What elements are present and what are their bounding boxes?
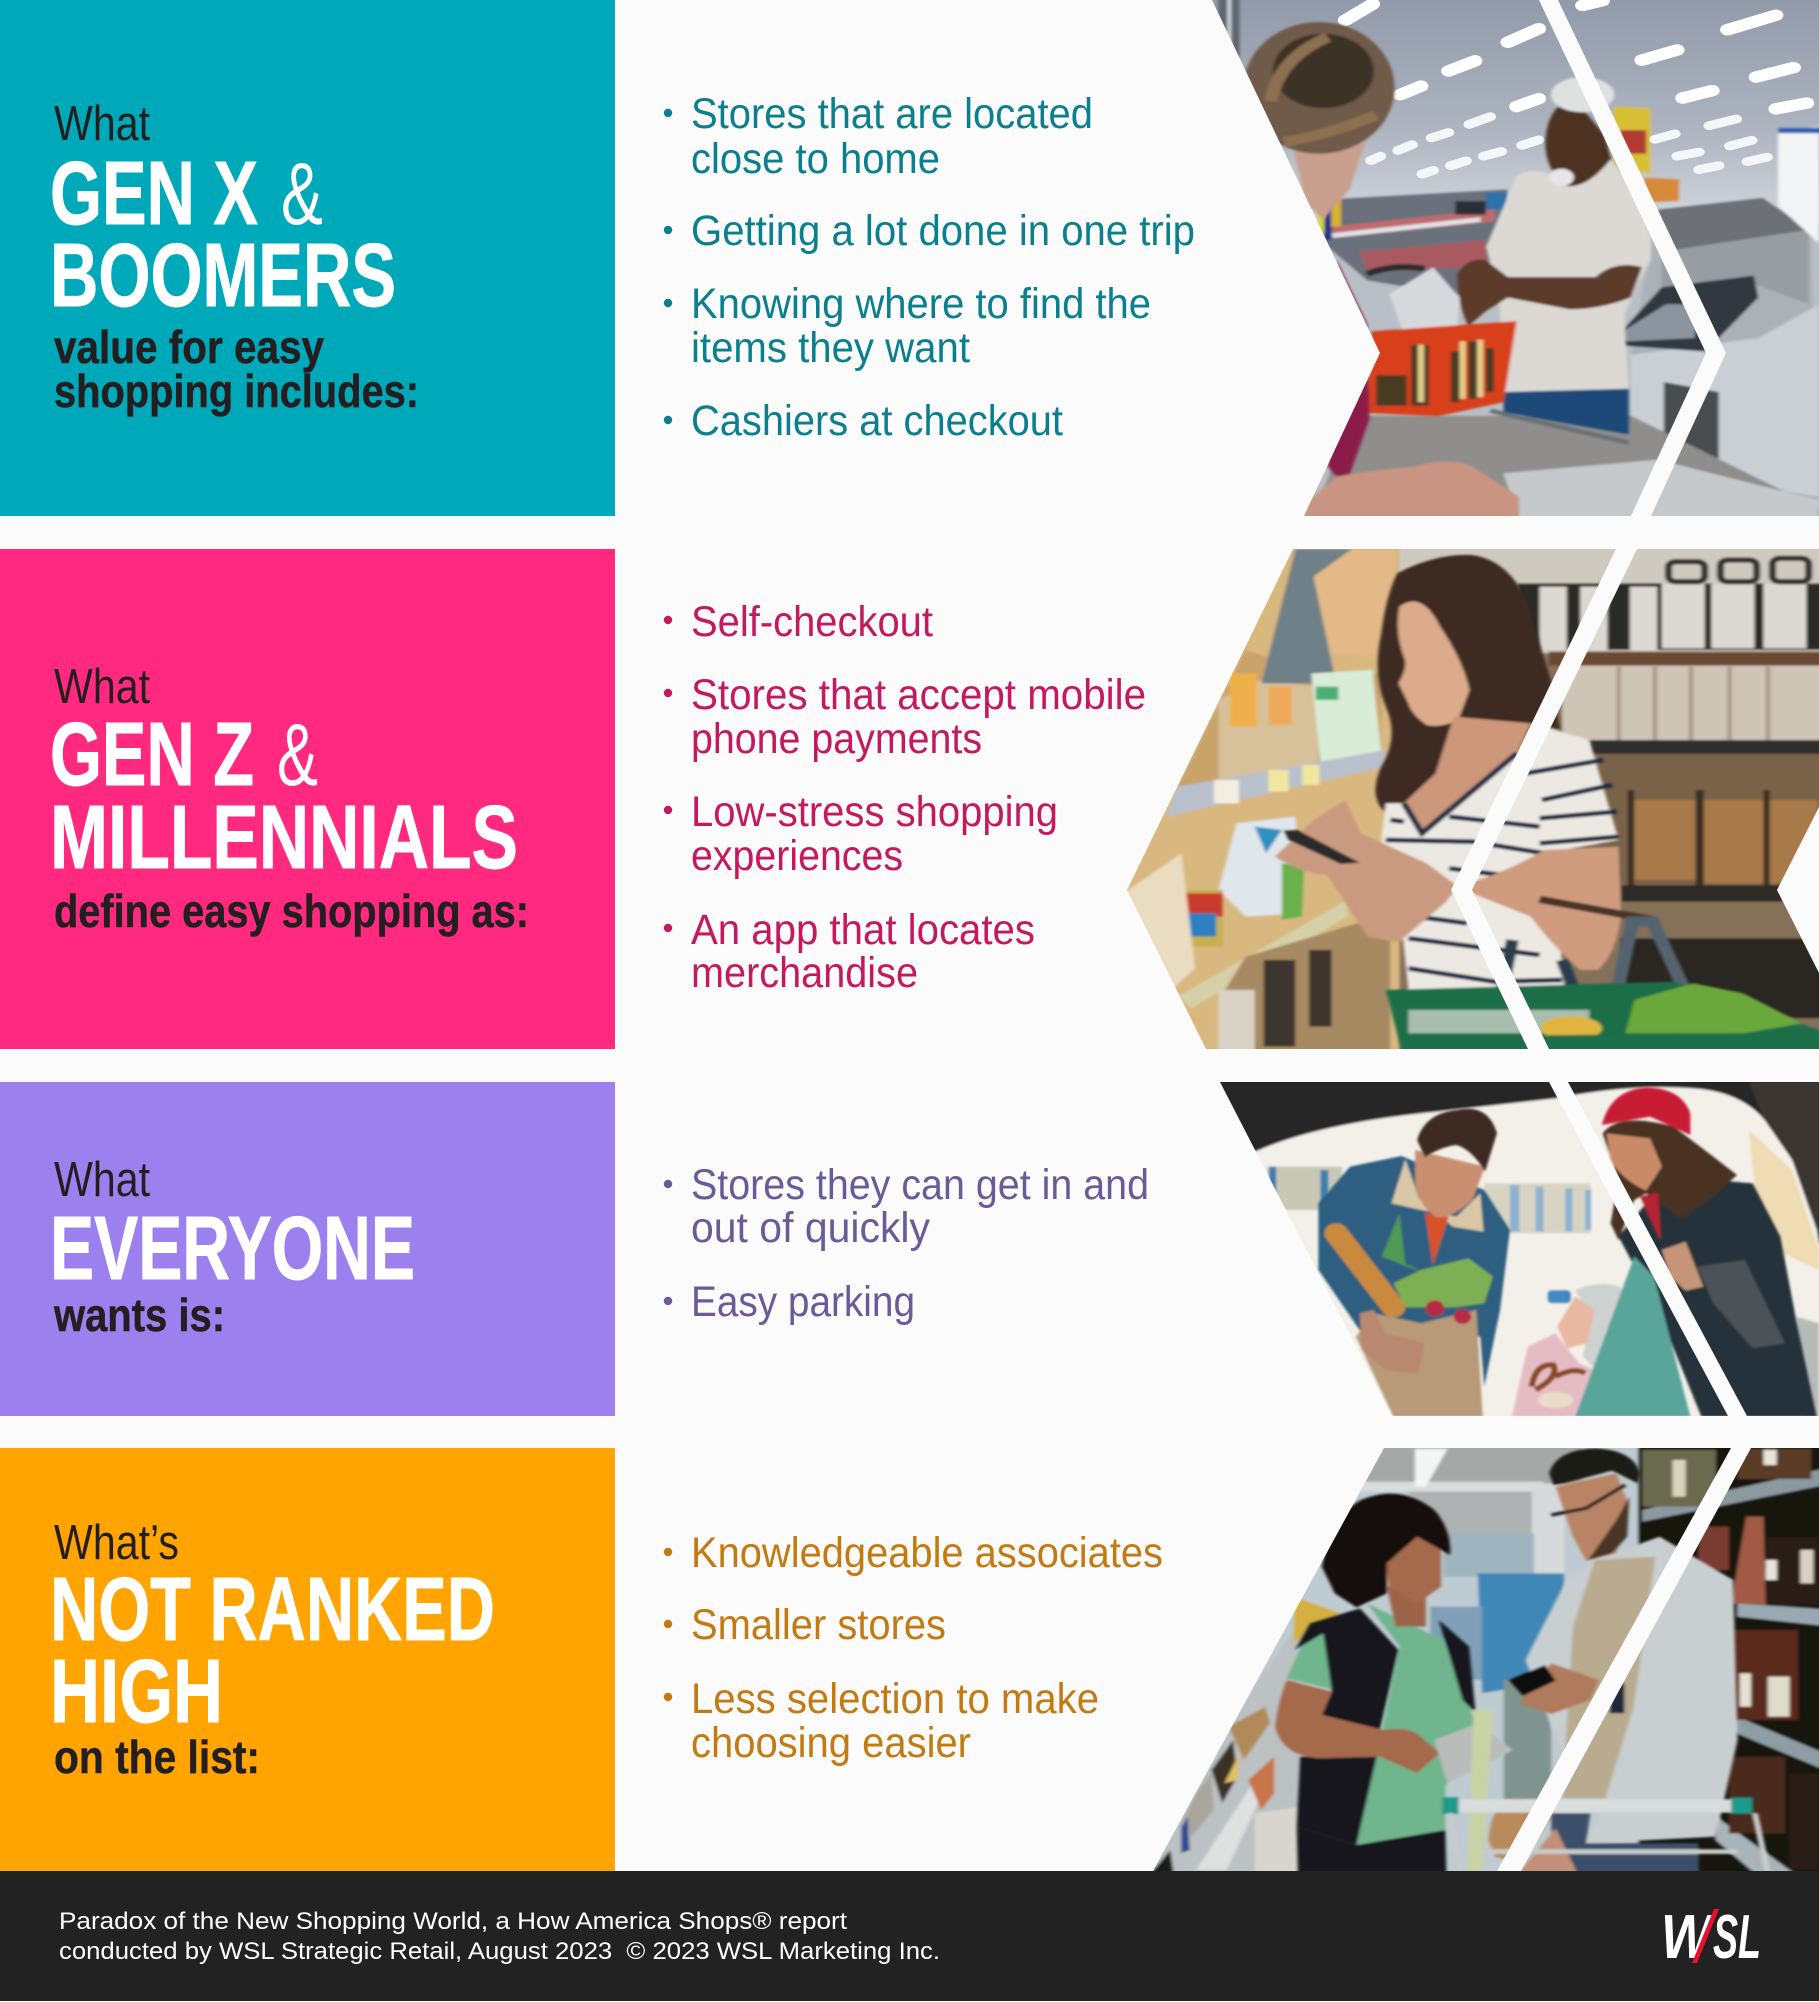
source credit: conducted by WSL Strategic Retail, August 2023 © 2023 WSL Marketing Inc. <box>59 1938 940 1965</box>
panel: not ranked high <box>0 1440 1819 1880</box>
heading: not ranked high: NOT RANKED <box>50 1560 495 1660</box>
pink colour block <box>0 549 615 1049</box>
cart and produce <box>1551 1813 1699 1880</box>
woman <box>1376 555 1560 813</box>
bullet list: not ranked high <box>664 1529 1163 1767</box>
photo: shopper at checkout with cashier <box>1212 0 1819 516</box>
bullet list: everyone <box>664 1161 1149 1326</box>
white diagonal stripe <box>1497 1448 1751 1871</box>
man <box>1318 1156 1510 1387</box>
bullet list: gen z and millennials: Low-stress shopping <box>691 788 1058 836</box>
heading: gen x and boomers: & <box>281 144 323 243</box>
bullet list: gen x and boomers: Knowing where to find the <box>691 280 1151 328</box>
bullet list: everyone: Easy parking <box>691 1278 915 1326</box>
heading: everyone: EVERYONE <box>50 1199 415 1299</box>
panel: gen x and boomers <box>0 0 1819 541</box>
woman <box>1618 1180 1817 1417</box>
heading: gen z and millennials <box>50 660 529 937</box>
bullet list: gen z and millennials: An app that locates <box>691 906 1035 954</box>
bullet list: gen x and boomers: Cashiers at checkout <box>691 397 1063 445</box>
bullet list: gen x and boomers <box>664 90 1195 445</box>
bullet list: everyone: Stores they can get in and <box>691 1161 1149 1209</box>
heading: gen x and boomers: BOOMERS <box>50 226 396 326</box>
heading: gen z and millennials: & <box>277 705 318 804</box>
white diagonal stripe <box>1549 1082 1747 1416</box>
bullet list: gen x and boomers: close to home <box>691 135 940 183</box>
heading: gen x and boomers: What <box>54 97 150 151</box>
bullet list: gen z and millennials: phone payments <box>691 715 982 763</box>
bullet list: not ranked high: Knowledgeable associates <box>691 1529 1163 1577</box>
heading: gen z and millennials: What <box>54 660 150 714</box>
orange colour block <box>0 1448 615 1871</box>
WSL logo: W <box>1661 1903 1715 1972</box>
panel: gen z and millennials <box>0 533 1819 1067</box>
basket <box>1540 899 1653 920</box>
heading: gen z and millennials: GEN Z <box>50 705 254 805</box>
heading: not ranked high: What’s <box>54 1516 179 1570</box>
bullet list: gen x and boomers: Getting a lot done in one trip <box>691 207 1195 255</box>
customer <box>1525 1537 1738 1843</box>
photo: family loading groceries into car trunk <box>1220 1082 1819 1416</box>
source credit: Paradox of the New Shopping World, a How America Shops® report <box>59 1908 847 1935</box>
man with shirt <box>1503 385 1629 434</box>
bullet list: everyone: out of quickly <box>691 1204 930 1252</box>
white chevron stripe <box>1451 549 1637 1049</box>
WSL logo: SL <box>1713 1903 1761 1972</box>
shelves left <box>1178 650 1381 787</box>
heading: gen z and millennials: define easy shopping as: <box>54 885 529 937</box>
heading: gen x and boomers <box>50 97 419 417</box>
bullet list: gen x and boomers: Stores that are located <box>691 90 1093 138</box>
heading: not ranked high <box>50 1516 495 1783</box>
panel: everyone <box>0 1082 1819 1416</box>
photo: store associate helping a customer <box>1123 1440 1819 1880</box>
WSL logo <box>1661 1903 1761 1972</box>
associate <box>1287 1627 1335 1690</box>
bullet list: gen z and millennials: merchandise <box>691 949 918 997</box>
white chevron stripe <box>1539 0 1726 516</box>
bullet list: gen z and millennials: experiences <box>691 832 903 880</box>
heading: gen x and boomers: GEN X <box>50 144 258 244</box>
heading: not ranked high: HIGH <box>50 1642 223 1742</box>
heading: gen x and boomers: value for easy <box>54 321 324 373</box>
heading: gen z and millennials: MILLENNIALS <box>50 788 518 888</box>
bullet list: gen x and boomers: items they want <box>691 324 970 372</box>
woman in foreground <box>1293 135 1367 220</box>
bullet list: not ranked high: choosing easier <box>691 1719 971 1767</box>
basket and bag <box>1389 267 1460 330</box>
bullet list: gen z and millennials <box>664 598 1146 997</box>
source credit <box>59 1908 940 1965</box>
heading: everyone: wants is: <box>53 1289 225 1341</box>
heading: everyone: What <box>54 1153 150 1207</box>
footer bar <box>0 1871 1819 2001</box>
bullet list: gen z and millennials: Stores that accept mobile <box>691 671 1146 719</box>
heading: gen x and boomers: shopping includes: <box>54 365 419 417</box>
purple colour block <box>0 1082 615 1416</box>
heading: everyone <box>50 1153 415 1341</box>
teal colour block <box>0 0 615 516</box>
bullet list: gen z and millennials: Self-checkout <box>691 598 933 646</box>
heading: not ranked high: on the list: <box>54 1731 260 1783</box>
girl <box>1512 1333 1595 1417</box>
bullet list: not ranked high: Less selection to make <box>691 1675 1099 1723</box>
photo: woman using phone in store aisle <box>1127 549 1819 1049</box>
bullet list: not ranked high: Smaller stores <box>691 1601 946 1649</box>
